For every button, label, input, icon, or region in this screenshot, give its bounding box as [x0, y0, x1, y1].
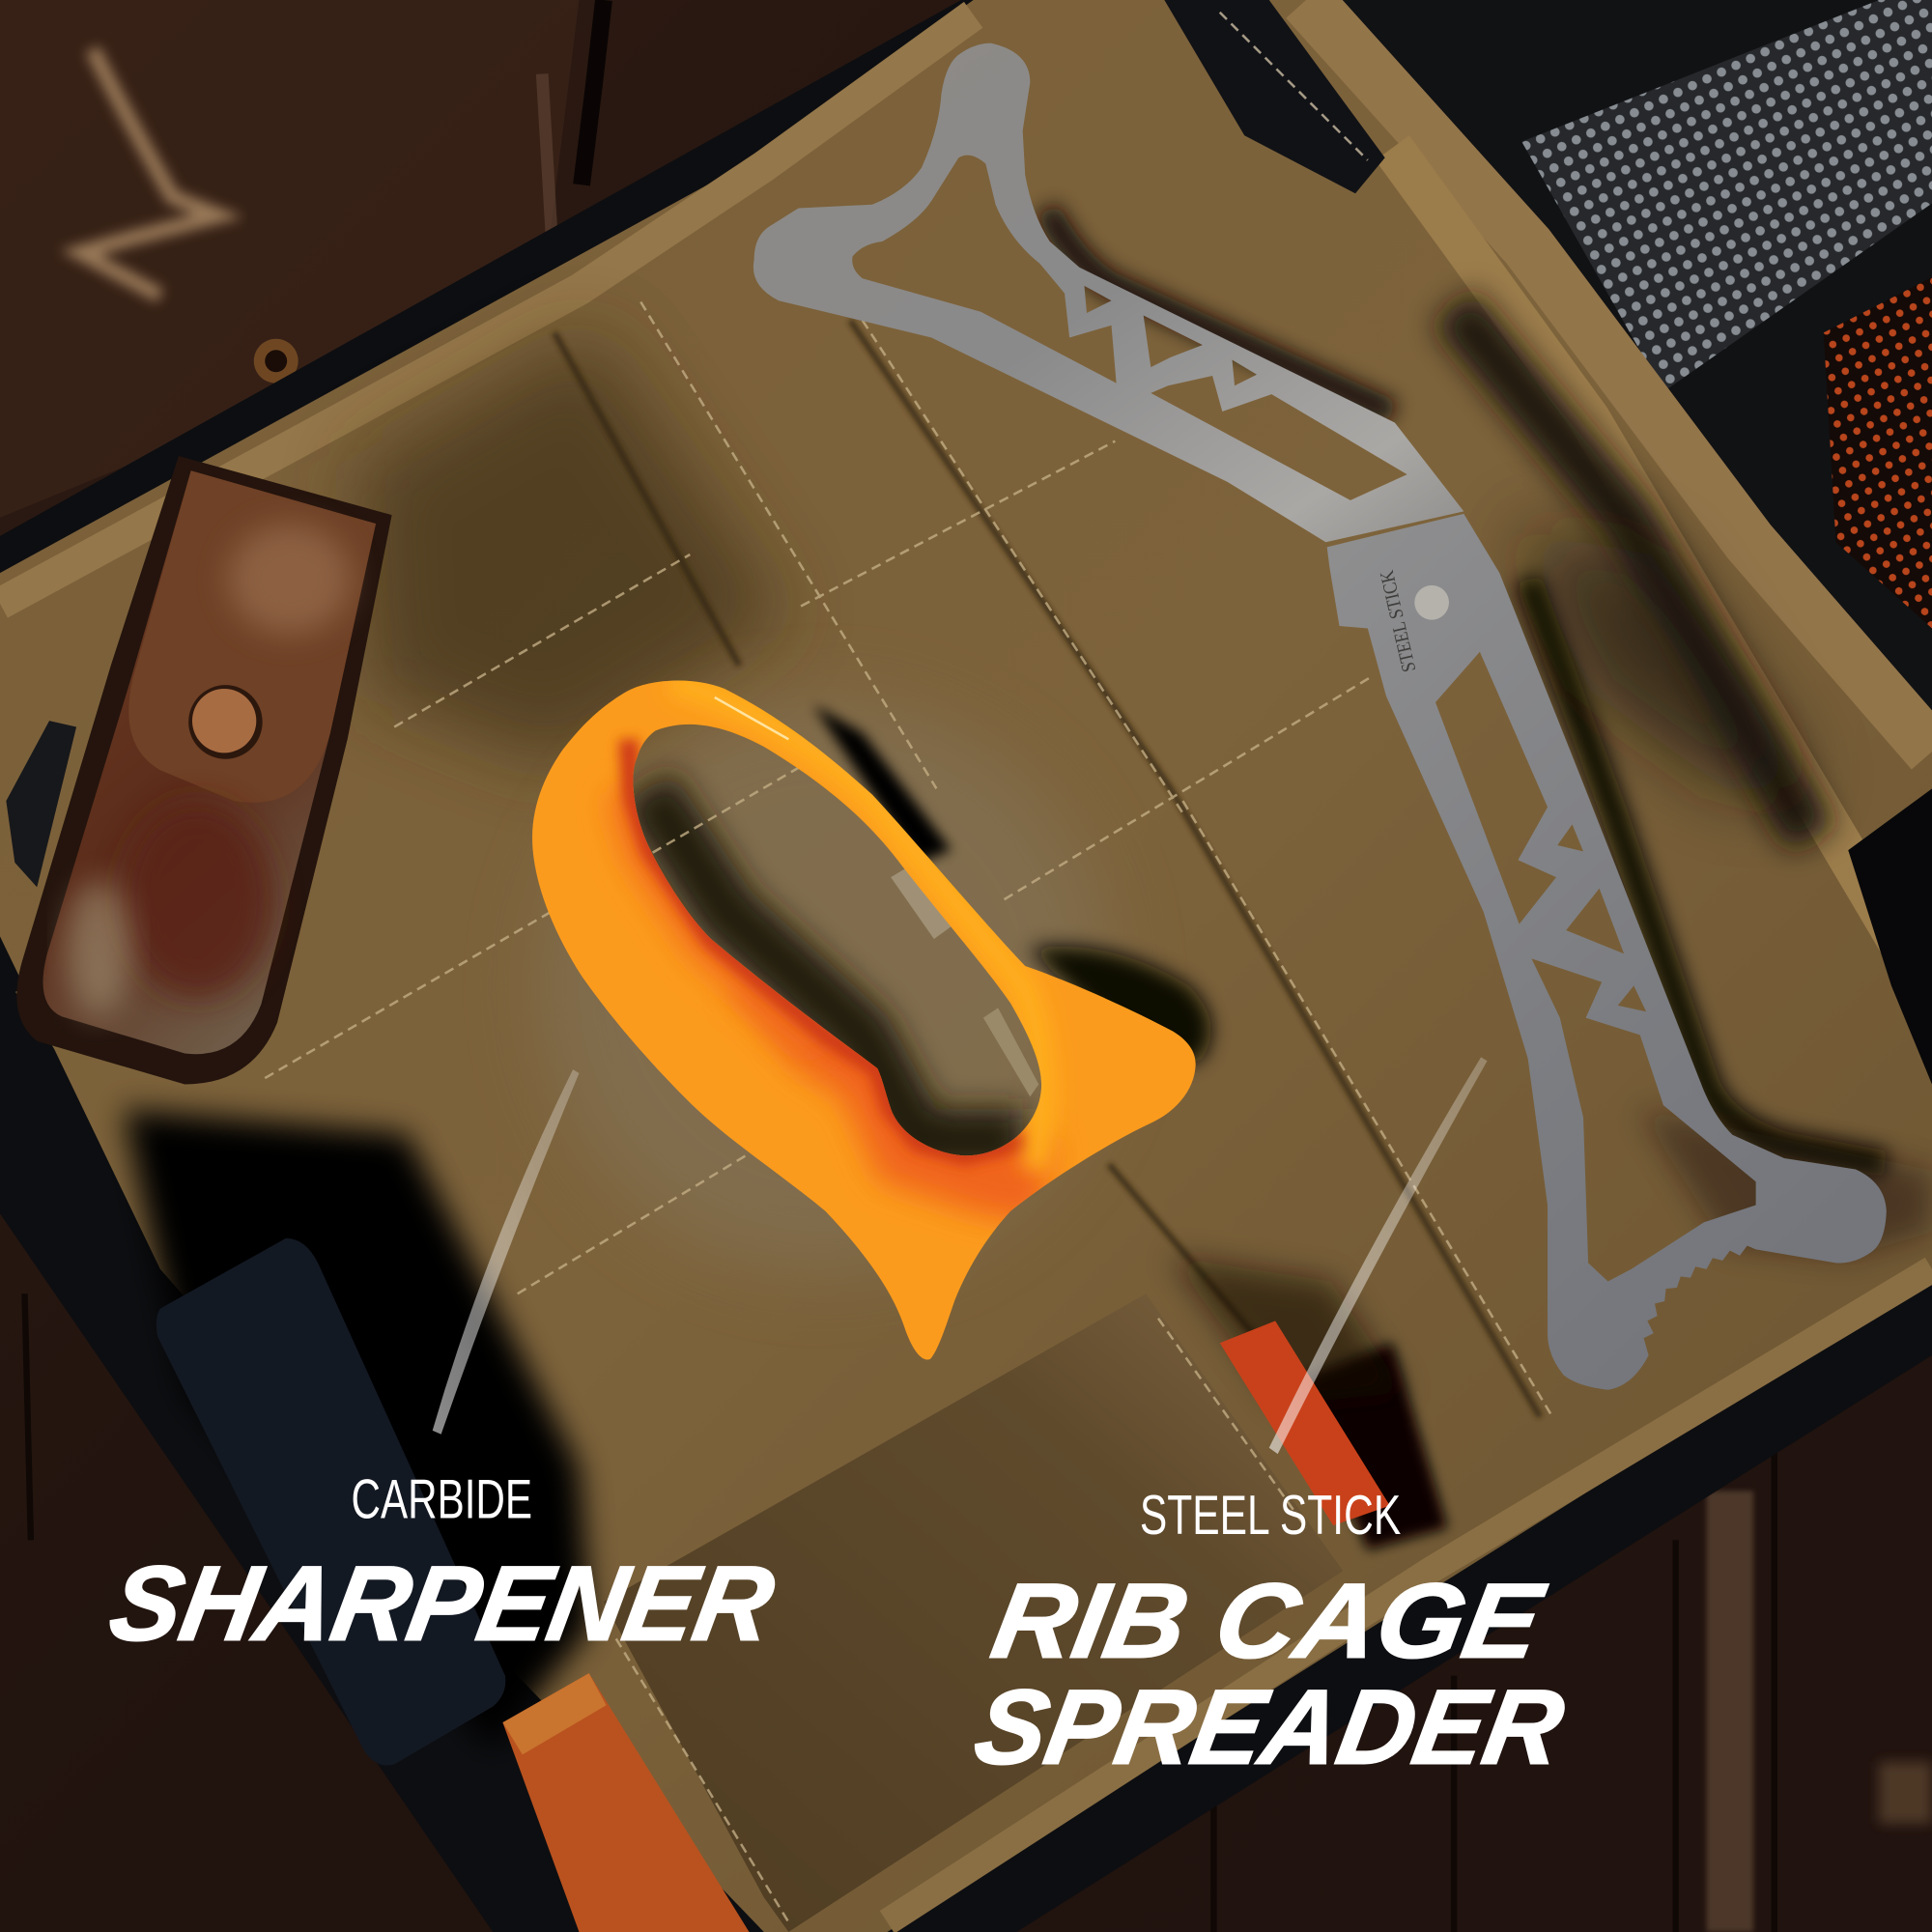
label: spreader: SPREADER [967, 1668, 1572, 1786]
fold shadows right [1454, 308, 1811, 838]
shadow top panel [357, 332, 788, 764]
engraved label: STEEL STICK [1377, 568, 1420, 674]
orange carbide sharpener [518, 666, 1208, 1368]
stitching [265, 301, 1552, 1922]
fold lines [554, 321, 1540, 1454]
callout line: sharpener [433, 1069, 579, 1435]
folding knife clip [6, 721, 76, 887]
lower pocket [604, 1293, 1343, 1932]
black gap right [1848, 788, 1932, 1084]
upper arm [753, 43, 1463, 542]
steel rib cage spreader [753, 43, 1887, 1390]
rivet [1414, 585, 1449, 620]
shadow center pockets [813, 705, 952, 863]
shadow right of lower arm [1528, 579, 1886, 1164]
leather sheath [16, 456, 392, 1084]
shadow bottom left [124, 1109, 591, 1749]
label: sharpener: SHARPENER [101, 1545, 782, 1663]
metal carbide inserts [891, 867, 1038, 1096]
label: rib cage: RIB CAGE [984, 1562, 1552, 1680]
desaturated canvas around sharpener [542, 702, 1109, 1269]
black strap at top [1164, 0, 1385, 193]
inner right binding strip [1392, 148, 1932, 998]
label: carbide: CARBIDE [352, 1468, 532, 1530]
orange strap right [1220, 1321, 1390, 1525]
orange strap bottom [502, 1673, 750, 1932]
shadow behind strap [1293, 1343, 1448, 1550]
lower arm [1327, 514, 1887, 1390]
top left binding strip [0, 14, 974, 604]
label: steel stick: STEEL STICK [1140, 1485, 1401, 1547]
snap button [188, 685, 263, 759]
shadow right of upper arm [1047, 210, 1392, 412]
callout line: rib cage spreader [1269, 1057, 1488, 1454]
lower binding strip [887, 1269, 1932, 1922]
mesh pocket [1343, 0, 1932, 715]
black pouch [156, 1238, 505, 1766]
outer right binding strip [1306, 0, 1932, 752]
